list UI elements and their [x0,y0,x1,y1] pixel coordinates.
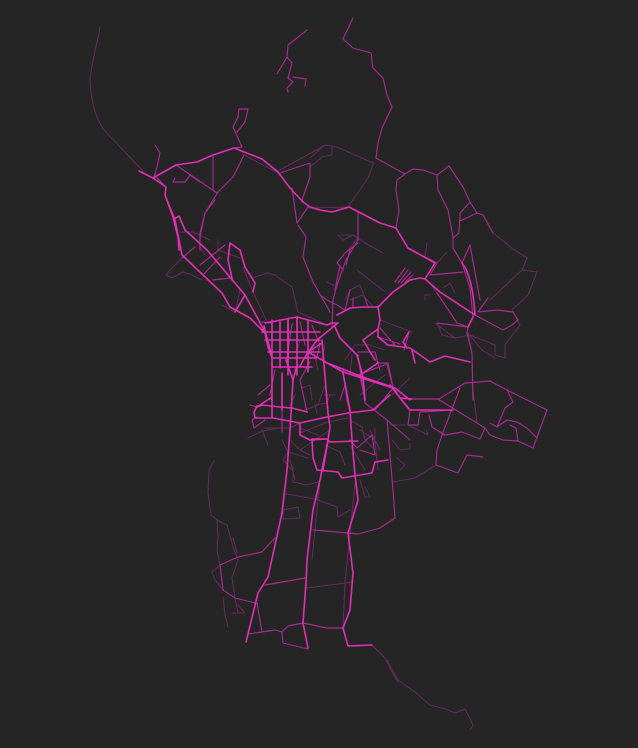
most travelled routes [139,148,475,648]
faint, rarely used routes [90,27,537,730]
medium frequency routes [154,18,547,649]
